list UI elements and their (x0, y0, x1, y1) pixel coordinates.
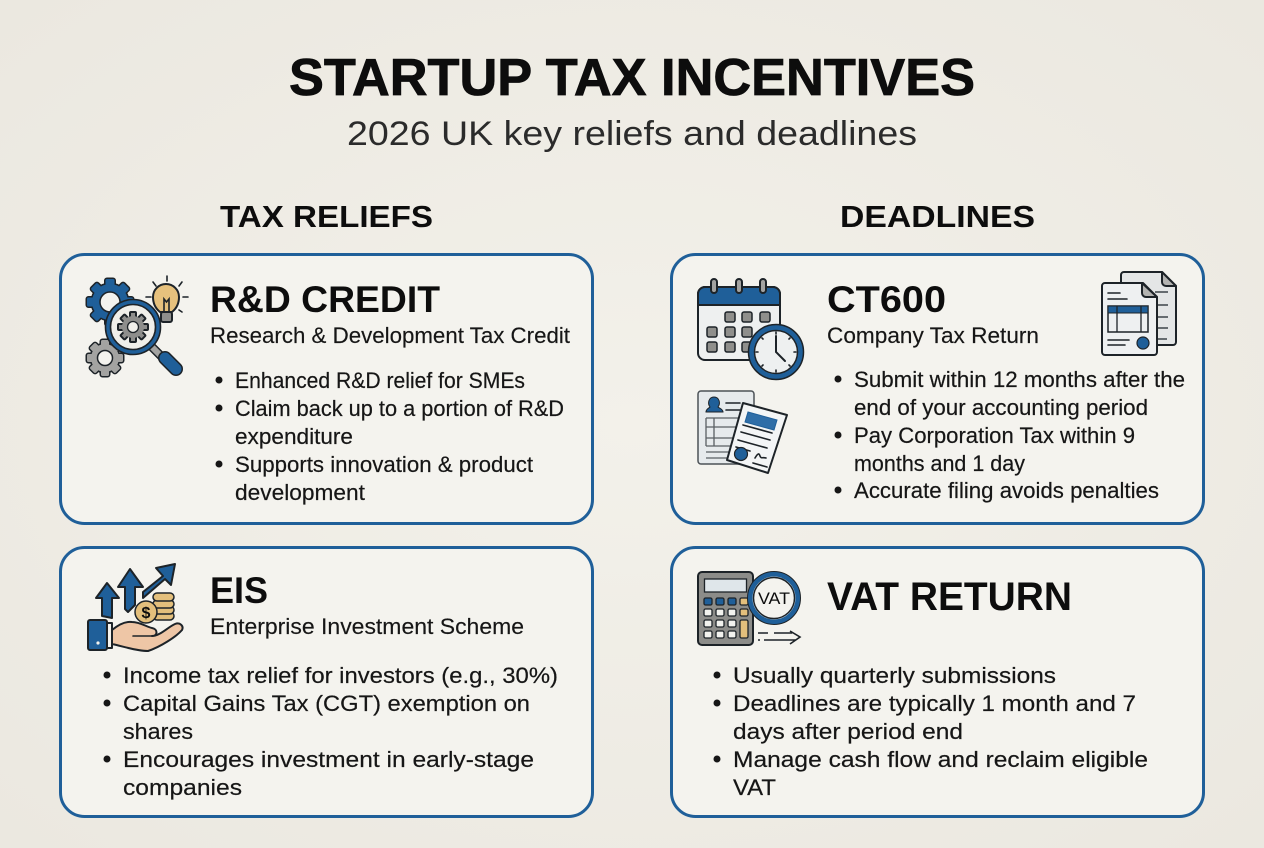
bullet list: CT600 (834, 367, 1185, 503)
bullet list: R&D credit: development (235, 480, 365, 505)
bullet list: VAT return: Usually quarterly submissions (733, 663, 1056, 688)
bullet list: VAT return (714, 663, 1148, 800)
bullet list: CT600: end of your accounting period (854, 395, 1148, 420)
bullet list: CT600: Submit within 12 months after the (854, 367, 1185, 392)
panel: R&D credit (60, 254, 592, 524)
bullet list: EIS: shares (123, 719, 193, 744)
bullet list: EIS: Capital Gains Tax (CGT) exemption on (123, 691, 530, 716)
VAT label in icon: VAT (758, 589, 790, 608)
bullet list: VAT return: Manage cash flow and reclaim eligible (733, 747, 1148, 772)
icon: calendar and clock (698, 279, 804, 380)
panel: CT600 (672, 254, 1204, 524)
heading: deadlines: DEADLINES (840, 199, 1035, 234)
bullet list: VAT return: Deadlines are typically 1 month and 7 (733, 691, 1136, 716)
bullet list: VAT return: days after period end (733, 719, 963, 744)
bullet list: EIS: Income tax relief for investors (e.g., 30%) (123, 663, 558, 688)
subheading: R&D credit: Research & Development Tax Credit (210, 323, 570, 348)
subheading: EIS: Enterprise Investment Scheme (210, 614, 524, 639)
bullet list: VAT return: VAT (733, 775, 776, 800)
bullet list: CT600: Accurate filing avoids penalties (854, 478, 1159, 503)
bullet list: R&D credit: Enhanced R&D relief for SMEs (235, 368, 525, 393)
bullet list: EIS: Encourages investment in early-stage (123, 747, 534, 772)
icon: hand with coins and rising arrows (88, 564, 183, 651)
icon: stacked tax return pages (1102, 272, 1176, 355)
panel: VAT return (672, 548, 1204, 816)
bullet list: EIS: companies (123, 775, 242, 800)
subheading: CT600: Company Tax Return (827, 323, 1039, 348)
dollar sign on coin: $ (142, 605, 151, 622)
heading: EIS: EIS (210, 570, 268, 611)
heading: tax reliefs: TAX RELIEFS (220, 199, 433, 234)
bullet list: R&D credit: Claim back up to a portion of R&D (235, 396, 564, 421)
bullet list: R&D credit (216, 368, 564, 505)
bullet list: CT600: months and 1 day (854, 451, 1025, 476)
bullet list: R&D credit: Supports innovation & product (235, 452, 533, 477)
heading: R&D credit: R&D CREDIT (210, 279, 440, 320)
icon: calculator with VAT cycle (698, 572, 800, 645)
heading: CT600: CT600 (827, 279, 946, 320)
panel: EIS (60, 548, 592, 816)
title: STARTUP TAX INCENTIVES (289, 49, 975, 107)
icon: gears, magnifier and light bulb (87, 276, 188, 376)
bullet list: EIS (104, 663, 558, 800)
icon: forms and documents (698, 391, 787, 473)
bullet list: CT600: Pay Corporation Tax within 9 (854, 423, 1135, 448)
bullet list: R&D credit: expenditure (235, 424, 353, 449)
heading: VAT return: VAT RETURN (827, 575, 1072, 619)
subtitle: 2026 UK key reliefs and deadlines (347, 115, 917, 153)
